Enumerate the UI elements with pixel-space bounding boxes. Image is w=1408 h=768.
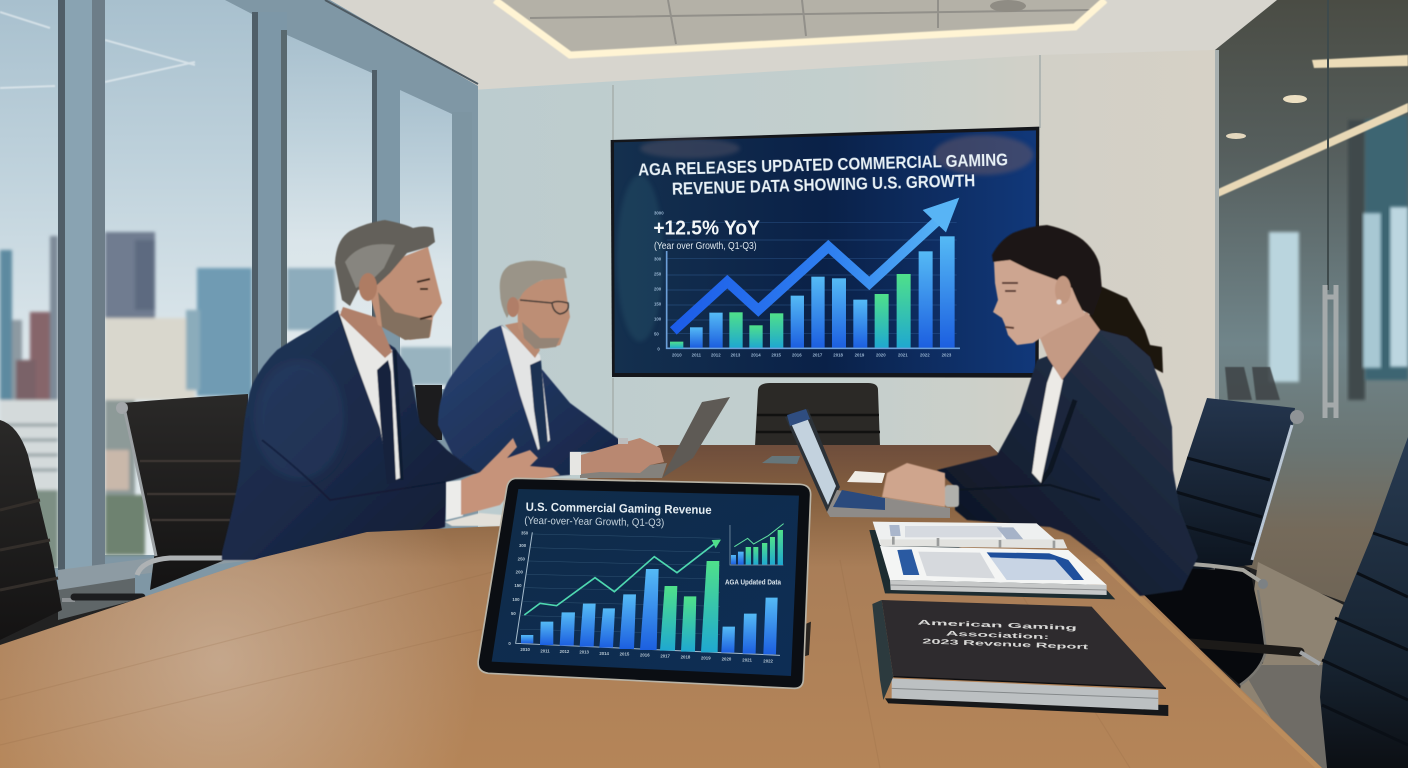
woman's chair right [1110,398,1320,685]
TV axis labels: 2012 [711,352,721,357]
tablet axis labels: 2016 [640,653,650,658]
first man face [370,247,442,340]
TV axis labels: 2019 [855,352,865,357]
first man shirt [338,310,400,482]
tablet axis labels: 100 [512,597,520,602]
glass partition [1215,0,1408,768]
woman hair [992,225,1102,316]
tablet inset chart [730,524,784,565]
laptop right [785,409,950,518]
TV axis labels: 0 [657,347,660,352]
tablet axis labels [508,530,774,663]
tablet: (Year-over-Year Growth, Q1-Q3) [524,515,664,529]
woman ear and earring [1055,276,1071,304]
woman neck [1040,312,1100,380]
tablet data label: AGA Updated Data [725,577,782,586]
tablet axis labels: 2012 [560,649,570,654]
background man's cuff and hands [570,452,581,475]
background man neck and head [505,322,540,358]
woman's hands and watch [882,463,959,507]
tablet axis labels: 2013 [579,650,590,655]
TV axis labels: 2022 [920,352,930,357]
TV axis labels: 150 [654,302,662,307]
laptop base [827,490,950,518]
tablet axis labels: 0 [508,641,511,646]
TV axis labels: 2010 [672,352,682,357]
TV axis labels: 2020 [876,352,886,357]
TV axis labels: 2011 [692,352,702,357]
papers on far table [762,456,885,483]
tablet axis labels: 2015 [620,652,630,657]
first man neck [340,307,392,358]
woman eye, brow, lips [1002,283,1018,328]
tablet title: U.S. Commercial Gaming Revenue [526,500,712,517]
TV axis labels: 50 [654,332,659,337]
tablet axis labels: 2020 [722,656,732,661]
back chair center [755,383,880,446]
TV bar chart [670,236,955,348]
city buildings [0,232,452,568]
background man shirt and tie [501,325,550,450]
window with city view [0,0,478,600]
book title: Association: [946,631,1049,641]
open binder [869,522,1115,599]
window frames [58,0,478,620]
TV axis labels: 3000 [654,210,664,215]
first man suit [222,310,477,560]
TV axis labels: 2016 [792,352,802,357]
TV axis labels: 300 [654,256,662,261]
paper under hand [445,513,502,526]
wall TV: (Year over Growth, Q1-Q3) [654,241,757,252]
first man hand [461,438,560,515]
report book [872,600,1168,716]
TV axis labels: 250 [654,272,662,277]
tablet trend arrow [524,540,721,615]
tablet axis labels: 2014 [599,651,610,656]
book title: American Gaming [918,620,1077,632]
tablet axis labels: 200 [516,570,523,575]
first man eye, brow, mouth [417,279,432,319]
background man hair [500,261,567,318]
book title: 2023 Revenue Report [922,638,1090,651]
tablet axis labels: 250 [518,556,525,561]
TV axis labels: 2017 [813,352,823,357]
TV headline [638,150,1009,199]
tablet axis labels: 50 [511,611,516,616]
conference table [0,445,1322,768]
tablet axis labels: 150 [514,583,522,588]
laptop base [580,463,667,478]
TV axis labels: 2015 [771,352,782,357]
tablet axis labels: 2011 [540,648,550,653]
floor [1240,562,1408,768]
TV headline: REVENUE DATA SHOWING U.S. GROWTH [672,170,975,199]
first man hair [335,220,435,306]
first man cuff [446,480,463,520]
tablet [478,478,811,688]
TV axis labels: 2023 [942,352,952,357]
first man's cuff and hand [445,438,560,526]
woman [937,225,1198,596]
chair far right [1320,437,1408,768]
laptop screen [785,409,840,512]
tablet axis labels: 350 [521,530,529,535]
TV chart grid [667,222,957,333]
background man glasses [520,300,568,314]
tablet axis labels: 2021 [742,657,753,662]
background man beard [522,322,560,349]
tablet axis labels: 2022 [763,658,774,663]
book title [917,620,1091,651]
window sill [58,545,252,612]
chair far left [0,420,142,640]
first man [222,220,477,560]
woman face [993,258,1085,345]
chair between men [415,385,442,440]
TV axis labels: 100 [654,317,662,322]
first man ear [359,273,377,301]
woman shirt [1032,366,1063,483]
tablet axis labels: 300 [519,543,527,548]
wall TV [611,127,1039,378]
TV axis labels: 2014 [751,352,761,357]
TV axis labels: 2018 [833,352,844,357]
back wall [472,50,1215,580]
TV axis labels [654,210,952,357]
TV axis labels: 2021 [898,352,908,357]
tablet axis labels: 2017 [660,654,671,659]
tablet axis labels: 2010 [520,647,531,652]
tablet axis labels: 2018 [681,655,691,660]
first man tie [377,360,396,484]
ceiling [0,0,1408,130]
TV headline: AGA RELEASES UPDATED COMMERCIAL GAMING [638,150,1008,180]
man in background [438,261,625,480]
TV growth arrow [673,198,959,331]
chair behind first man [116,394,258,590]
tablet axis labels: 2019 [701,655,711,660]
laptop center-left [570,397,730,478]
woman ponytail [1088,285,1163,373]
TV axis labels: 200 [654,287,662,292]
tablet grid [520,534,720,634]
laptop screen back [662,397,730,478]
TV YoY callout: +12.5% YoY [653,217,760,239]
woman suit [937,330,1198,596]
tablet bar chart [521,561,778,654]
TV axis labels: 2013 [731,352,741,357]
first man beard [378,292,432,340]
door handle [1325,285,1336,418]
background man suit [438,325,625,480]
